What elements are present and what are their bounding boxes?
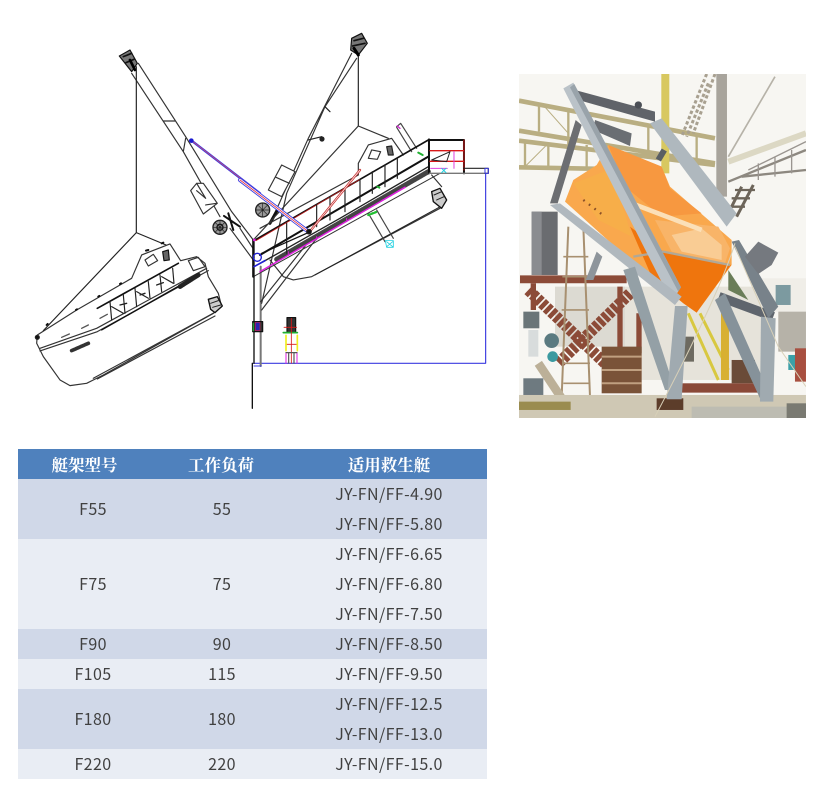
buildings [532,212,806,380]
table header row: JY-FN/FF-5.80 [335,511,443,535]
row: F90: JY-FN/FF-8.50 [335,631,443,655]
hydraulic ram [189,138,260,193]
yellow stair [688,313,728,380]
table header row: 艇架型号 [52,452,118,476]
brown scaffold [520,227,639,397]
row: F55: F55 [79,496,107,520]
row: F90: F90 [79,631,107,655]
release strut [368,210,393,247]
raised davit arm [240,33,367,303]
row: F55: JY-FN/FF-4.90 [335,481,443,505]
row: F220: JY-FN/FF-15.0 [335,751,443,775]
row: F55: 55 [213,496,231,520]
right lower frame legs [715,240,778,402]
yellow truss background [519,74,716,174]
steel mast and gantry [682,74,806,217]
winch unit [283,318,297,363]
table header row: 适用救生艇 [348,452,430,476]
table header row: 75 [213,571,231,595]
red diagonal strut [307,170,360,234]
row: F220: 220 [208,751,236,775]
hinge detail [253,239,265,267]
row: F220 [18,749,487,779]
table header row: 工作负荷 [188,452,254,476]
drawing: lowered lifeboat and davit arm [35,50,260,386]
row: F55 [18,479,487,539]
hydraulic ram [240,180,308,232]
row: F90 [18,629,487,659]
main davit frame [550,83,806,417]
launching rails [253,140,440,277]
drawing: stowed lifeboat on davit [240,33,488,408]
lowered lifeboat [35,243,222,386]
row: F180: JY-FN/FF-12.5 [335,691,443,715]
photo: lifeboat on gravity davit at shipyard [519,74,806,418]
specification table [18,449,487,779]
row: F180 [18,689,487,749]
row: F75 [18,539,487,629]
stowed lifeboat [253,123,447,280]
table header row: F75 [79,571,107,595]
platform handrail [377,139,488,188]
support column and base [252,238,317,408]
row: F90: 90 [213,631,231,655]
table header row: JY-FN/FF-13.0 [335,721,443,745]
table header row [18,449,487,779]
machinery lower left [523,312,806,400]
row: F180: 180 [208,706,236,730]
row: F105 [18,659,487,689]
table header row: JY-FN/FF-6.80 [335,571,443,595]
table header row: JY-FN/FF-7.50 [335,601,443,625]
davit arm [119,50,253,260]
winch on frame [745,242,778,274]
foundation outline [253,173,486,363]
hoisting cable and slings [43,67,170,331]
row: F75: JY-FN/FF-6.65 [335,541,443,565]
ground [519,383,807,420]
orange lifeboat [565,145,732,313]
row: F220: F220 [74,751,112,775]
row: F105: F105 [74,661,112,685]
row: F180: F180 [74,706,112,730]
engineering drawing: davit and lifeboat positions [34,32,489,409]
row: F105: 115 [208,661,236,685]
row: F105: JY-FN/FF-9.50 [335,661,443,685]
